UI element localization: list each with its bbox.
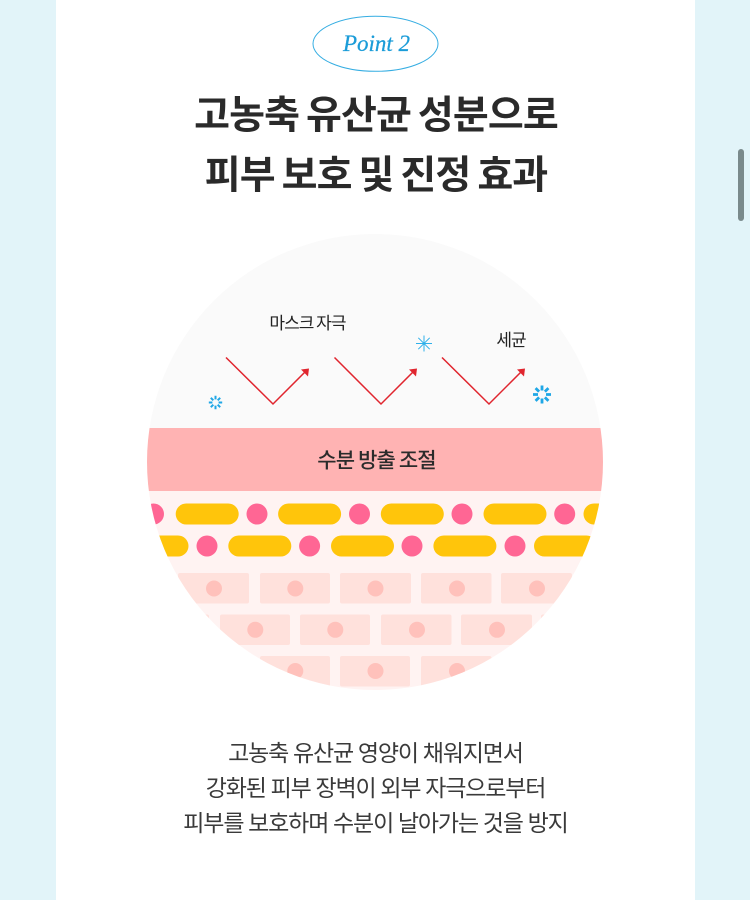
title (194, 94, 558, 198)
label: mask irritation: 마스크 자극 (269, 314, 346, 333)
panel: skin layers (147, 491, 603, 691)
description text: 피부를 보호하며 수분이 날아가는 것을 방지 (183, 810, 568, 836)
icon: thin germ spark (416, 336, 432, 352)
scrollbar thumb (738, 149, 744, 221)
panel: moisture control band (147, 428, 603, 491)
description text: 고농축 유산균 영양이 채워지면서 (228, 740, 523, 766)
title: 고농축 유산균 성분으로 (194, 94, 558, 138)
arrow: bounce 2 (334, 358, 417, 404)
badge: Point 2 (313, 16, 438, 71)
lipid row 2 (126, 536, 597, 556)
skin cell bricks (178, 573, 572, 686)
arrow: bounce 1 (226, 358, 309, 404)
title: 피부 보호 및 진정 효과 (205, 154, 547, 198)
arrow: bounce 3 (442, 358, 525, 404)
icon: large germ spark (533, 386, 551, 404)
description text: 강화된 피부 장벽이 외부 자극으로부터 (206, 775, 545, 801)
label: bacteria: 세균 (496, 331, 526, 350)
description text (183, 740, 568, 836)
lipid row 1 (151, 504, 600, 524)
icon: small germ spark (209, 396, 222, 409)
diagram: skin barrier circle (147, 314, 603, 690)
label: moisture control: 수분 방출 조절 (317, 450, 436, 472)
panel: outer air zone (147, 234, 603, 428)
badge: Point 2: Point 2 (342, 31, 410, 56)
